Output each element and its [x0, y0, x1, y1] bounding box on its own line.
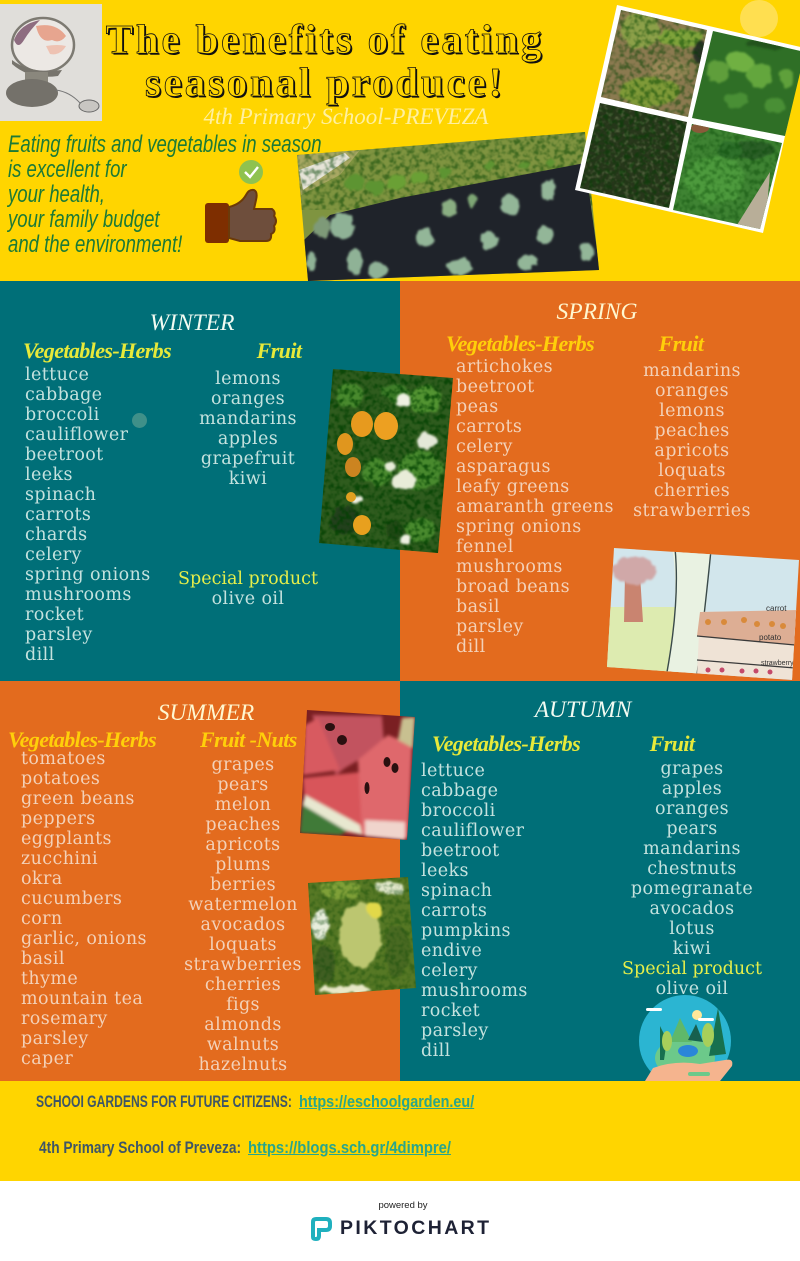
- image: photo collage of four garden plots: [575, 5, 800, 233]
- icon: thumbs up with check mark: [205, 160, 277, 243]
- text: primary school link: https://blogs.sch.gr/4dimpre/: [248, 1138, 451, 1157]
- panel: summer: [0, 681, 400, 1081]
- subheading: fruit and nuts: Fruit -Nuts: [200, 727, 297, 752]
- list: autumn fruit: grapes apples oranges pears mandarins chestnuts pomegranate avocados lotus kiwi: [631, 759, 753, 959]
- image: watermelon photo: [300, 710, 415, 840]
- heading: summer: SUMMER: [158, 700, 254, 726]
- image: sun circle: [740, 0, 778, 37]
- list: spring vegetables: artichokes beetroot peas carrots celery asparagus leafy greens amaranth greens spring onions fennel mushrooms broad beans basil parsley dill: [456, 357, 614, 657]
- text block: intro message: your health,: [8, 181, 105, 208]
- image: child's drawing of a garden: carrot: [766, 604, 787, 613]
- subheading: fruit: Fruit: [650, 731, 694, 756]
- panel: header: [0, 0, 800, 281]
- text block: intro message: Eating fruits and vegetables in season: [8, 131, 322, 158]
- text block: intro message: is excellent for: [8, 156, 127, 183]
- text: primary school link: [39, 1138, 451, 1157]
- image: grapes photo: [308, 877, 416, 995]
- title: seasonal produce!: [145, 59, 505, 105]
- title: [106, 16, 544, 106]
- panel: winter: [0, 281, 400, 681]
- icon: hand holding the earth: [639, 995, 732, 1081]
- text block: intro message: and the environment!: [8, 231, 182, 258]
- image: child's drawing of a garden: potato: [759, 633, 782, 642]
- text block: intro message: your family budget: [8, 206, 160, 233]
- subheading: fruit: Fruit: [659, 331, 703, 356]
- text: olive oil: olive oil: [212, 589, 284, 609]
- text: school gardens link: https://eschoolgarden.eu/: [299, 1092, 474, 1111]
- image: orange tree photo: [319, 369, 453, 553]
- list: autumn vegetables: lettuce cabbage broccoli cauliflower beetroot leeks spinach carrots pumpkins endive celery mushrooms rocket parsley dill: [421, 761, 528, 1061]
- panel: footer links: [0, 1081, 800, 1181]
- subheading: vegetables and herbs: Vegetables-Herbs: [446, 331, 594, 356]
- subheading: special product: Special product: [622, 959, 762, 979]
- heading: winter: WINTER: [150, 310, 234, 336]
- subheading: special product: Special product: [178, 569, 318, 589]
- icon: piktochart logo: [311, 1217, 332, 1241]
- panel: spring: [400, 281, 800, 681]
- list: spring fruit: mandarins oranges lemons peaches apricots loquats cherries strawberries: [633, 361, 751, 521]
- heading: autumn: AUTUMN: [535, 697, 631, 723]
- text: school gardens link: [36, 1092, 474, 1111]
- list: summer fruit and nuts: grapes pears melon peaches apricots plums berries watermelon avocados loquats strawberries cherries figs almonds walnuts hazelnuts: [184, 755, 302, 1075]
- text block: intro message: [7, 131, 322, 258]
- heading: spring: SPRING: [557, 299, 637, 325]
- subheading: vegetables and herbs: Vegetables-Herbs: [432, 731, 580, 756]
- list: winter vegetables: lettuce cabbage broccoli cauliflower beetroot leeks spinach carrots chards celery spring onions mushrooms rocket parsley dill: [25, 365, 151, 665]
- decorative dot: [132, 413, 147, 428]
- image: child's drawing of a garden: strawberry: [761, 660, 794, 667]
- image: hand-drawn globe: [0, 4, 102, 121]
- text: powered by: powered by: [378, 1200, 428, 1211]
- subheading: fruit: Fruit: [257, 338, 301, 363]
- image: garden rows photo: [297, 132, 599, 281]
- image: child's drawing of a garden: [607, 548, 799, 680]
- list: winter fruit: lemons oranges mandarins apples grapefruit kiwi: [199, 369, 297, 489]
- subheading: vegetables and herbs: Vegetables-Herbs: [8, 727, 156, 752]
- text: piktochart wordmark: PIKTOCHART: [340, 1217, 491, 1239]
- list: summer vegetables: tomatoes potatoes green beans peppers eggplants zucchini okra cucumbers corn garlic, onions basil thyme mountain tea rosemary parsley caper: [21, 749, 147, 1069]
- subheading: vegetables and herbs: Vegetables-Herbs: [23, 338, 171, 363]
- text: school gardens link: SCHOOI GARDENS FOR FUTURE CITIZENS:: [36, 1092, 292, 1111]
- title: The benefits of eating: [106, 16, 544, 62]
- panel: autumn: [400, 681, 800, 1081]
- panel: powered by footer: [0, 1181, 800, 1261]
- text: primary school link: 4th Primary School of Preveza:: [39, 1138, 241, 1157]
- text: olive oil: olive oil: [656, 979, 728, 999]
- subtitle: school name: 4th Primary School-PREVEZA: [204, 104, 488, 129]
